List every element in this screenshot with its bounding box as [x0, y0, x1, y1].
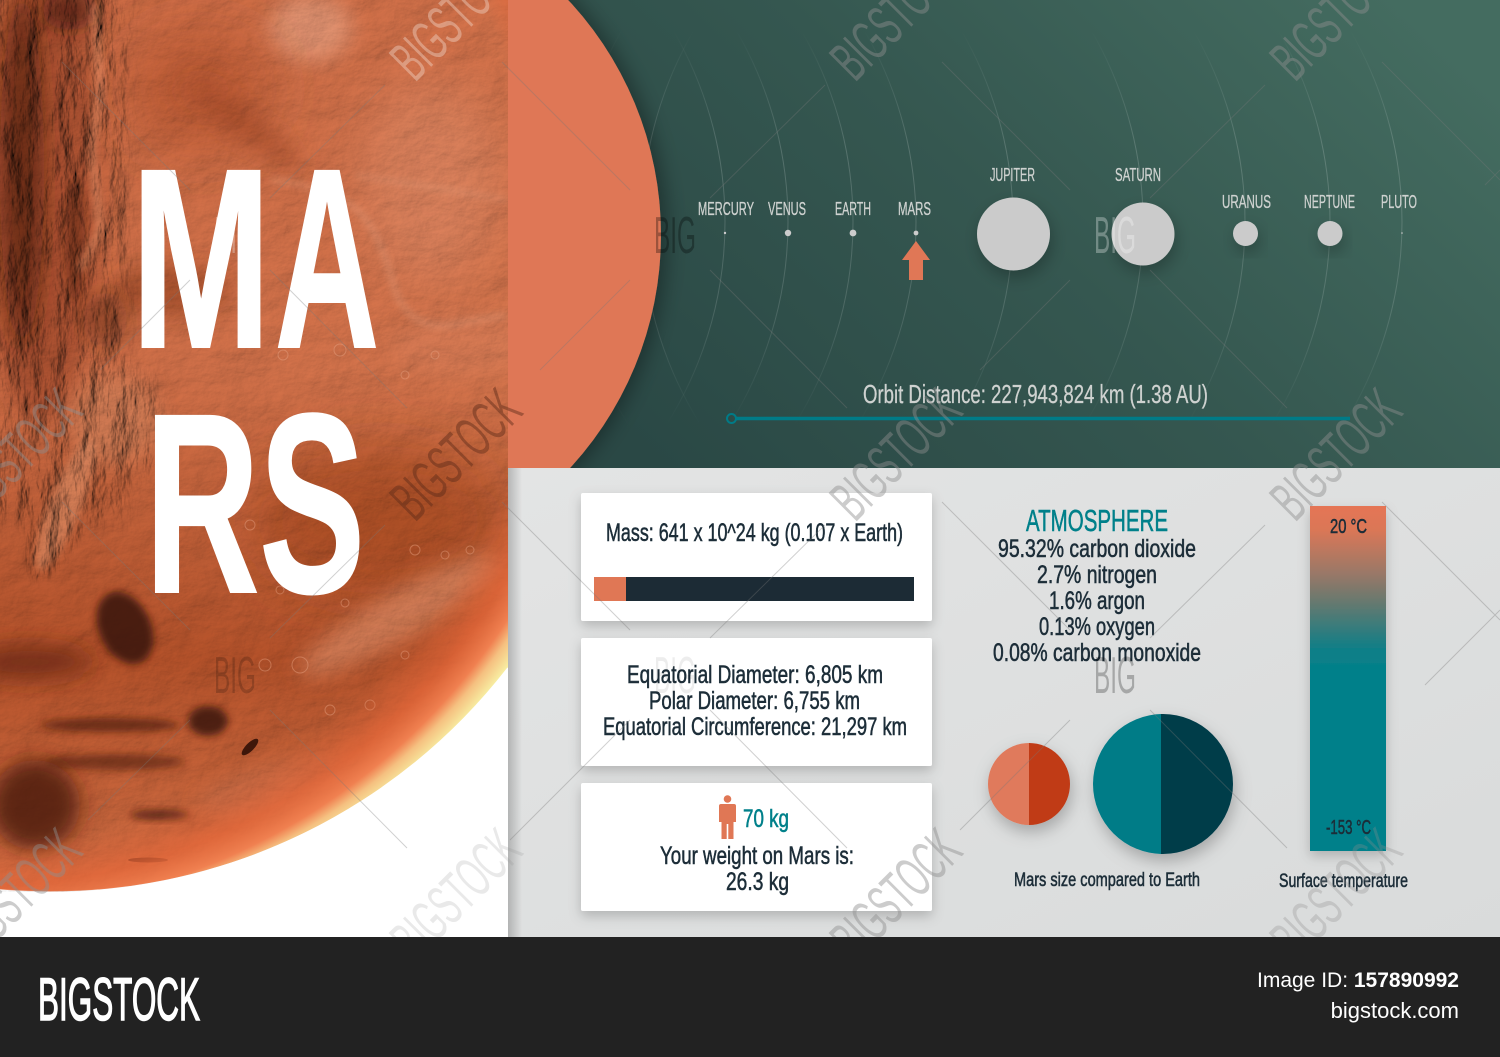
card: weight: 70 kg — [743, 805, 789, 833]
planet: Saturn: SATURN — [1115, 165, 1161, 185]
chart: surface temperature: -153 °C — [1326, 817, 1371, 839]
watermark overlay: BIG — [214, 647, 256, 705]
panel: orbit diagram background — [508, 0, 1500, 468]
card: diameters: Equatorial Circumference: 21,297 km — [603, 713, 907, 741]
chart: surface temperature — [1279, 506, 1408, 892]
planet: Mars — [898, 199, 931, 235]
card: weight — [581, 783, 932, 911]
atmosphere text block: 95.32% carbon dioxide — [998, 535, 1196, 563]
watermark overlay: BIG — [654, 207, 696, 265]
atmosphere text block: 0.08% carbon monoxide — [993, 639, 1201, 667]
panel: white left background — [0, 0, 508, 937]
watermark overlay: BIG — [214, 207, 256, 265]
planet: Pluto: PLUTO — [1381, 192, 1417, 212]
watermark overlay: BIG — [1094, 207, 1136, 265]
planet: Saturn — [1112, 165, 1174, 266]
orbit distance label: Orbit Distance: 227,943,824 km (1.38 AU) — [863, 379, 1208, 409]
watermark overlay: BIGSTOCK — [818, 377, 974, 532]
bar: mass compared to Earth — [594, 577, 914, 601]
planet: Mercury — [698, 199, 754, 234]
orbits of the planets — [649, 48, 1402, 396]
planet: Earth — [835, 199, 871, 236]
card: diameters — [581, 638, 932, 766]
planet: Mars: MARS — [898, 199, 931, 219]
icon: Earth disc — [1093, 714, 1233, 854]
watermark overlay: BIG — [1094, 647, 1136, 705]
chart: Mars size compared to Earth: Mars size compared to Earth — [1014, 870, 1200, 891]
card: diameters: Equatorial Diameter: 6,805 km — [627, 661, 883, 689]
card: weight: 26.3 kg — [726, 868, 789, 896]
planet: Venus — [768, 199, 806, 236]
atmosphere text block: 0.13% oxygen — [1039, 613, 1155, 641]
craters — [245, 344, 474, 715]
image: planet Mars surface — [0, 0, 508, 892]
atmosphere text block: ATMOSPHERE — [1026, 503, 1168, 538]
logo: BIGSTOCK: BIGSTOCK — [38, 966, 200, 1033]
atmosphere text block — [993, 503, 1201, 667]
shape: coral sun circle — [508, 0, 672, 468]
card: weight: Your weight on Mars is: — [660, 842, 854, 870]
arrow: Mars marker — [902, 241, 930, 280]
watermark overlay: BIGSTOCK — [378, 377, 534, 532]
title: MARS — [131, 116, 379, 647]
card: diameters: Polar Diameter: 6,755 km — [649, 687, 860, 715]
watermark overlay: BIG — [654, 647, 696, 705]
planet: Pluto — [1381, 192, 1417, 234]
card: mass: Mass: 641 x 10^24 kg (0.107 x Earth) — [606, 519, 903, 547]
mask outside the planet — [0, 667, 509, 940]
watermark overlay: BIGSTOCK — [378, 817, 534, 972]
title: MARS: M — [131, 116, 271, 402]
website: bigstock.com — [1331, 998, 1459, 1023]
icon: Mars disc — [988, 743, 1070, 825]
chart: Mars size compared to Earth — [988, 714, 1233, 891]
plains ridges — [270, 180, 507, 326]
atmosphere text block: 1.6% argon — [1049, 587, 1145, 615]
chart: surface temperature: Surface temperature — [1279, 871, 1408, 892]
planet row — [698, 165, 1417, 280]
planet: Uranus — [1222, 192, 1271, 246]
planet: Mercury: MERCURY — [698, 199, 754, 219]
orbit distance line — [727, 414, 1350, 423]
watermark overlay: BIGSTOCK — [818, 817, 974, 972]
image id: Image ID: 157890992 — [1257, 969, 1459, 992]
icon: person — [719, 795, 736, 839]
planet: Neptune: NEPTUNE — [1304, 192, 1355, 212]
card: mass — [581, 493, 932, 621]
title: MARS: A — [275, 116, 379, 402]
footer bar — [0, 937, 1500, 1057]
planet: Jupiter — [977, 165, 1050, 270]
planet: Earth: EARTH — [835, 199, 871, 219]
title: MARS: RS — [145, 361, 365, 647]
planet: Jupiter: JUPITER — [990, 165, 1035, 185]
planet: Neptune — [1304, 192, 1355, 246]
canyon relief on the left — [0, 0, 160, 576]
dark volcanic regions — [0, 583, 261, 862]
panel: statistics background — [508, 468, 1500, 937]
chart: surface temperature: 20 °C — [1330, 516, 1367, 538]
planet: Uranus: URANUS — [1222, 192, 1271, 212]
planet: Venus: VENUS — [768, 199, 806, 219]
atmosphere text block: 2.7% nitrogen — [1037, 561, 1157, 589]
